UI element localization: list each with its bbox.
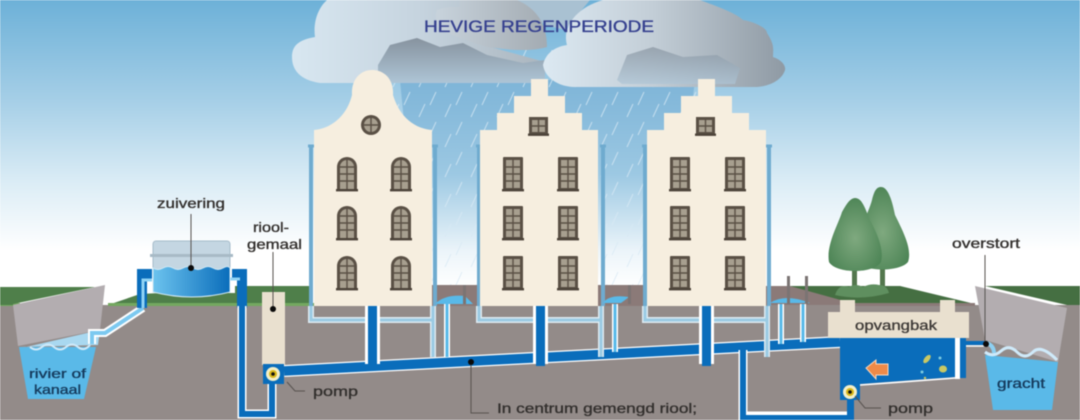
house 1 <box>314 70 432 306</box>
right pit <box>975 286 1080 410</box>
label: rivier of kanaal: rivier of <box>29 366 87 381</box>
clouds <box>292 0 785 87</box>
sky background <box>0 0 1080 306</box>
label: overstort: overstort <box>952 235 1020 251</box>
label: gracht: gracht <box>997 375 1045 391</box>
house 2 <box>480 79 598 306</box>
label: zuivering: zuivering <box>157 195 225 211</box>
arrow <box>866 360 888 379</box>
opvangbak: opvangbak <box>855 317 938 333</box>
label: pomp left: pomp <box>313 383 358 399</box>
label: pomp right: pomp <box>888 400 933 416</box>
label: sewer note: In centrum gemengd riool; <box>497 400 697 416</box>
pump left <box>263 364 284 384</box>
title: HEVIGE REGENPERIODE <box>424 18 654 36</box>
label: rivier of kanaal: kanaal <box>34 382 81 397</box>
water: rivier of kanaal <box>19 347 96 399</box>
street drains <box>435 276 810 357</box>
opvangbak <box>828 300 994 400</box>
right cloud underside <box>617 47 740 84</box>
rain <box>375 50 720 290</box>
label: riool-: riool- <box>253 219 289 235</box>
rioolgemaal shaft <box>262 292 285 365</box>
debris <box>920 354 947 379</box>
labels <box>157 195 1020 416</box>
left cloud underside <box>378 38 545 83</box>
round window <box>361 115 381 135</box>
trees <box>829 187 909 298</box>
leader lines and dots <box>188 214 989 413</box>
zuivering tank <box>142 241 242 308</box>
pipe from tank to sewer <box>242 305 272 414</box>
overflow water basin <box>840 338 955 400</box>
bushes <box>835 284 889 298</box>
front tree <box>829 198 882 290</box>
left cloud <box>292 0 545 83</box>
label: rivier of kanaal <box>29 366 87 397</box>
main sewer <box>284 342 850 420</box>
rain shaft <box>400 80 695 290</box>
house pipes <box>308 146 772 366</box>
back cloud <box>515 0 590 30</box>
label: gemaal: gemaal <box>247 236 302 252</box>
ground and green strips <box>0 285 1080 420</box>
outflow pipe to river <box>92 308 143 344</box>
right cloud <box>543 0 785 87</box>
left pit <box>0 285 105 399</box>
back tree <box>856 187 909 290</box>
water: gracht <box>985 355 1058 410</box>
pump right <box>843 385 857 420</box>
upper mid cloud <box>436 0 547 50</box>
house 3 <box>647 79 766 306</box>
